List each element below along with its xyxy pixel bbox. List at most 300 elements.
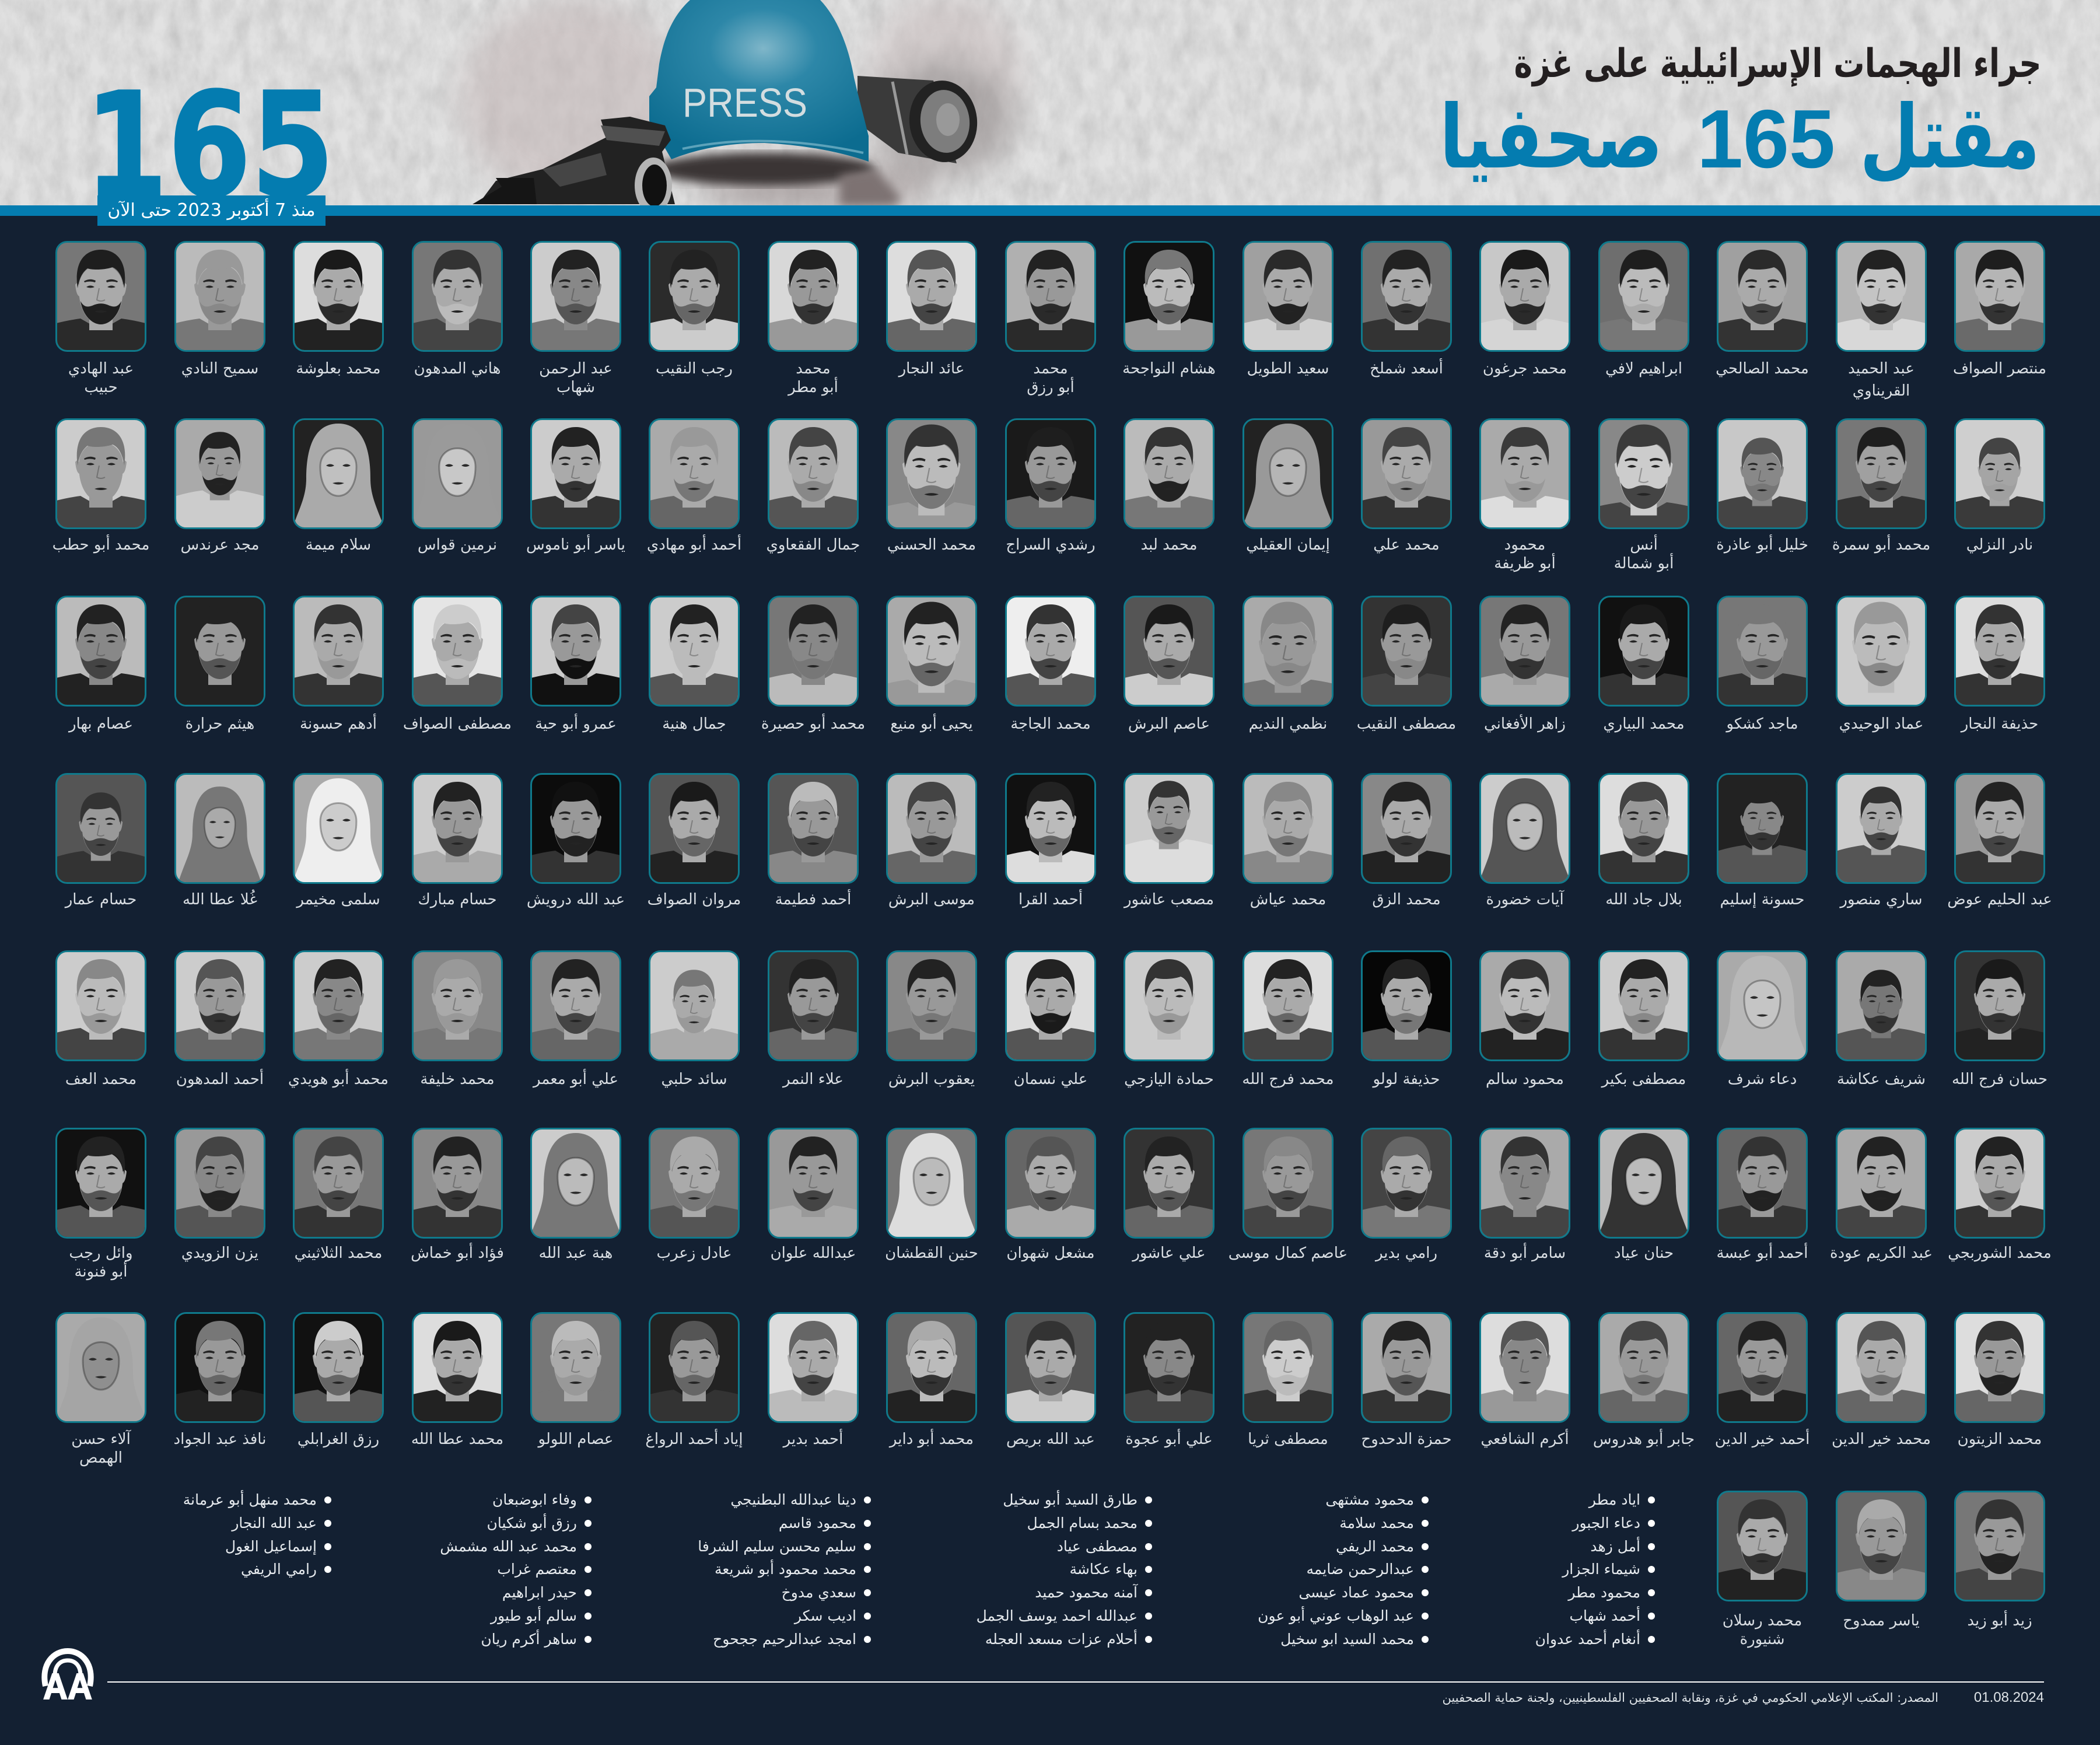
card: محمد العف bbox=[55, 950, 146, 1108]
card: يزن الزويدي bbox=[174, 1128, 265, 1285]
card: حسان فرج الله bbox=[1954, 950, 2045, 1108]
card: محمود أبو ظريفة bbox=[1479, 418, 1570, 576]
card: سائد حلبي bbox=[649, 950, 740, 1108]
card: محمد عياش: محمد عياش bbox=[1250, 891, 1326, 908]
name list column 3: طارق السيد أبو سخيل bbox=[1003, 1491, 1138, 1508]
card: أحمد فطيمة: أحمد فطيمة bbox=[775, 891, 851, 908]
card: إيمان العقيلي: إيمان العقيلي bbox=[1246, 536, 1330, 554]
card: حمادة اليازجي bbox=[1124, 950, 1214, 1108]
card: رجب النقيب bbox=[649, 241, 740, 398]
card: محمد الجاجة bbox=[1005, 596, 1096, 753]
card: فؤاد أبو خماش: فؤاد أبو خماش bbox=[411, 1244, 504, 1262]
portrait row 5 bbox=[0, 950, 2100, 1120]
card: عصام بهار: عصام بهار bbox=[69, 715, 133, 733]
card: محمد أبو رزق bbox=[1005, 241, 1096, 396]
card: ياسر ممدوح bbox=[1836, 1491, 1927, 1648]
card: عبد الله بريص: عبد الله بريص bbox=[1006, 1431, 1095, 1448]
card: محمد خير الدين bbox=[1836, 1312, 1927, 1470]
card: منتصر الصواف: منتصر الصواف bbox=[1953, 360, 2046, 377]
name list column 2: محمود مشتهى bbox=[1325, 1491, 1414, 1508]
name list column 3: آمنه محمود حميد bbox=[1035, 1584, 1138, 1601]
card: محمد الصالحي: محمد الصالحي bbox=[1716, 360, 1809, 377]
card: إيمان العقيلي bbox=[1242, 418, 1334, 576]
card: عماد الوحيدي bbox=[1836, 596, 1927, 753]
portrait row 7 bbox=[0, 1312, 2100, 1481]
card: أدهم حسونة: أدهم حسونة bbox=[300, 715, 377, 733]
card: محمد خليفة bbox=[412, 950, 503, 1108]
header banner with helmet illustration bbox=[0, 0, 2100, 205]
card: حنين القطشان: حنين القطشان bbox=[885, 1244, 978, 1262]
icon: AA logo bbox=[41, 1648, 94, 1701]
footer rule bbox=[107, 1681, 2044, 1683]
card: عبد الرحمن شهاب bbox=[530, 241, 621, 398]
card: محمد الحسني bbox=[886, 418, 977, 576]
card: ماجد كشكو: ماجد كشكو bbox=[1726, 715, 1798, 733]
card: محمد بعلوشة bbox=[293, 241, 384, 398]
main title: صحفيا bbox=[1440, 87, 1663, 188]
name list column 1: اياد مطر bbox=[1589, 1491, 1640, 1508]
card: بلال جاد الله bbox=[1598, 773, 1689, 931]
name list column 5: حيدر ابراهيم bbox=[502, 1584, 577, 1601]
card: هيثم حرارة: هيثم حرارة bbox=[186, 715, 254, 733]
card: ساري منصور bbox=[1836, 773, 1927, 931]
card: نرمين قواس: نرمين قواس bbox=[418, 536, 497, 554]
card: حسونة إسليم bbox=[1717, 773, 1808, 931]
card: مصطفى النقيب: مصطفى النقيب bbox=[1357, 715, 1456, 733]
icon: blue press helmet bbox=[649, 0, 869, 162]
card: علي أبو عجوة bbox=[1124, 1312, 1214, 1470]
card: هبة عبد الله bbox=[530, 1128, 621, 1285]
card: أسعد شملخ: أسعد شملخ bbox=[1370, 360, 1443, 377]
card: وائل رجب أبو فنونة bbox=[55, 1128, 146, 1285]
icon: camera lens bbox=[858, 76, 981, 166]
card: محمد أبو حصيرة: محمد أبو حصيرة bbox=[761, 715, 865, 733]
card: علي نسمان bbox=[1005, 950, 1096, 1108]
card: أحمد أبو عبسة bbox=[1717, 1128, 1808, 1285]
card: حسونة إسليم: حسونة إسليم bbox=[1720, 891, 1804, 908]
card: محمود سالم: محمود سالم bbox=[1486, 1071, 1564, 1088]
card: أكرم الشافعي: أكرم الشافعي bbox=[1480, 1431, 1569, 1448]
card: جابر أبو هدروس bbox=[1598, 1312, 1689, 1470]
card: حسام مبارك bbox=[412, 773, 503, 931]
card: سميح النادي: سميح النادي bbox=[181, 360, 258, 377]
card: أحمد خير الدين: أحمد خير الدين bbox=[1715, 1431, 1810, 1448]
card: دعاء شرف bbox=[1717, 950, 1808, 1108]
name list column 2 bbox=[1125, 1488, 1429, 1651]
card: عاصم كمال موسى: عاصم كمال موسى bbox=[1228, 1244, 1348, 1262]
card: سعيد الطويل bbox=[1242, 241, 1334, 377]
card: ياسر أبو ناموس: ياسر أبو ناموس bbox=[526, 536, 625, 554]
name list column 1: شيماء الجزار bbox=[1562, 1561, 1640, 1578]
card: يحيى أبو منيع: يحيى أبو منيع bbox=[890, 715, 973, 733]
card: جمال هنية: جمال هنية bbox=[662, 715, 726, 733]
card: آيات خضورة: آيات خضورة bbox=[1486, 891, 1564, 908]
card: يعقوب البرش: يعقوب البرش bbox=[888, 1071, 975, 1088]
card: عادل زعرب bbox=[649, 1128, 740, 1285]
name list column 4 bbox=[568, 1488, 871, 1651]
card: جمال الفقعاوي: جمال الفقعاوي bbox=[766, 536, 860, 554]
card: محمد لبد: محمد لبد bbox=[1140, 536, 1198, 554]
name list column 1: أمل زهد bbox=[1590, 1538, 1640, 1555]
name list column 1: أحمد شهاب bbox=[1569, 1607, 1640, 1624]
card: عماد الوحيدي: عماد الوحيدي bbox=[1839, 715, 1923, 733]
name list column 1: دعاء الجبور bbox=[1572, 1515, 1640, 1531]
card: أحمد أبو عبسة: أحمد أبو عبسة bbox=[1717, 1244, 1808, 1262]
name list column 4: سعدي مدوخ bbox=[782, 1584, 856, 1601]
card: عائد النجار bbox=[886, 241, 977, 398]
card: ابراهيم لافي: ابراهيم لافي bbox=[1605, 360, 1682, 377]
card: علي أبو معمر: علي أبو معمر bbox=[533, 1071, 618, 1088]
card: ماجد كشكو bbox=[1717, 596, 1808, 753]
card: يحيى أبو منيع bbox=[886, 596, 977, 753]
portrait row 8 bbox=[0, 1491, 2100, 1660]
icon: blue press helmet: PRESS bbox=[682, 80, 807, 125]
card: ياسر أبو ناموس bbox=[530, 418, 621, 576]
card: نافذ عبد الجواد bbox=[174, 1312, 265, 1470]
name list column 6: محمد منهل أبو عرمانة bbox=[183, 1491, 317, 1508]
card: عبدالله علوان: عبدالله علوان bbox=[771, 1244, 856, 1262]
card: محمد رسلان شنيورة: محمد رسلان bbox=[1723, 1612, 1802, 1629]
card: محمد الثلاثيني bbox=[293, 1128, 384, 1285]
card: موسى البرش: موسى البرش bbox=[888, 891, 975, 908]
card: رشدي السراج bbox=[1005, 418, 1096, 576]
card: هشام النواجحة bbox=[1122, 241, 1216, 377]
card: مجد عرندس bbox=[174, 418, 265, 576]
name list column 3: مصطفى عياد bbox=[1057, 1538, 1138, 1555]
card: محمد الزيتون: محمد الزيتون bbox=[1958, 1431, 2042, 1448]
card: محمد فرج الله bbox=[1242, 950, 1334, 1108]
card: مصطفى ثريا: مصطفى ثريا bbox=[1248, 1431, 1328, 1448]
card: علاء النمر bbox=[768, 950, 859, 1108]
card: محمد عياش bbox=[1242, 773, 1334, 931]
card: شريف عكاشة: شريف عكاشة bbox=[1837, 1071, 1926, 1088]
card: حنين القطشان bbox=[886, 1128, 977, 1285]
date badge bbox=[97, 195, 326, 226]
portrait row 6 bbox=[0, 1128, 2100, 1297]
card: أحمد خير الدين bbox=[1717, 1312, 1808, 1470]
card: حسام عمار bbox=[55, 773, 146, 931]
card: محمد أبو رزق: محمد bbox=[1033, 360, 1068, 377]
card: محمد عطا الله bbox=[412, 1312, 503, 1470]
name list column 6: رامي الريفي bbox=[241, 1561, 317, 1578]
card: محمد رسلان شنيورة bbox=[1717, 1491, 1808, 1648]
card: سلمى مخيمر: سلمى مخيمر bbox=[296, 891, 380, 908]
card: سلام ميمة bbox=[293, 418, 384, 576]
card: زيد أبو زيد bbox=[1954, 1491, 2045, 1648]
card: نظمي النديم: نظمي النديم bbox=[1249, 715, 1327, 733]
card: عبد الكريم عودة bbox=[1836, 1128, 1927, 1285]
card: رامي بدير: رامي بدير bbox=[1376, 1244, 1437, 1262]
blue band bbox=[0, 205, 2100, 216]
card: خليل أبو عاذرة bbox=[1717, 418, 1808, 576]
card: عادل زعرب: عادل زعرب bbox=[656, 1244, 732, 1262]
name list column 4: دينا عبدالله البطنيجي bbox=[730, 1491, 856, 1508]
card: نظمي النديم bbox=[1242, 596, 1334, 753]
card: عبد الهادي حبيب: عبد الهادي bbox=[68, 360, 134, 377]
card: ابراهيم لافي bbox=[1598, 241, 1689, 377]
card: محمد أبو سمرة: محمد أبو سمرة bbox=[1832, 536, 1930, 554]
card: مروان الصواف bbox=[649, 773, 740, 931]
card: بلال جاد الله: بلال جاد الله bbox=[1605, 891, 1682, 908]
name list column 5 bbox=[288, 1488, 592, 1651]
card: نادر النزلي: نادر النزلي bbox=[1966, 536, 2033, 554]
card: عبد الهادي حبيب: حبيب bbox=[84, 379, 118, 396]
card: عبد الرحمن شهاب: عبد الرحمن bbox=[539, 360, 612, 377]
card: هبة عبد الله: هبة عبد الله bbox=[539, 1244, 612, 1262]
card: آلاء حسن الهمص: آلاء حسن bbox=[71, 1431, 131, 1448]
card: محمد أبو داير bbox=[886, 1312, 977, 1470]
name list column 3 bbox=[849, 1488, 1152, 1651]
card: محمود أبو ظريفة: أبو ظريفة bbox=[1494, 555, 1556, 572]
card: عبد الحليم عوض: عبد الحليم عوض bbox=[1947, 891, 2052, 908]
card: محمود سالم bbox=[1479, 950, 1570, 1108]
card: علي نسمان: علي نسمان bbox=[1014, 1071, 1087, 1088]
card: حمادة اليازجي: حمادة اليازجي bbox=[1124, 1071, 1214, 1088]
card: نافذ عبد الجواد: نافذ عبد الجواد bbox=[174, 1431, 266, 1448]
source note: المصدر: المكتب الإعلامي الحكومي في غزة، ونقابة الصحفيين الفلسطينيين، ولجنة حماية الصحفيين bbox=[1442, 1691, 1938, 1705]
card: سلام ميمة: سلام ميمة bbox=[306, 536, 371, 554]
card: هاني المدهون bbox=[412, 241, 503, 398]
card: محمد الزق: محمد الزق bbox=[1372, 891, 1441, 908]
name list column 6 bbox=[28, 1488, 331, 1581]
card: سامر أبو دقة: سامر أبو دقة bbox=[1484, 1244, 1566, 1262]
card: علاء النمر: علاء النمر bbox=[783, 1071, 844, 1088]
card: محمد البياري bbox=[1598, 596, 1689, 753]
card: حمزة الدحدوح bbox=[1361, 1312, 1452, 1470]
card: علي عاشور: علي عاشور bbox=[1132, 1244, 1206, 1262]
card: مصطفى بكير bbox=[1598, 950, 1689, 1108]
card: أحمد المدهون: أحمد المدهون bbox=[176, 1071, 264, 1088]
card: علي عاشور bbox=[1124, 1128, 1214, 1285]
card: محمد أبو حطب: محمد أبو حطب bbox=[52, 536, 149, 554]
card: عمرو أبو حية bbox=[530, 596, 621, 753]
card: أنس أبو شمالة: أنس bbox=[1630, 536, 1658, 554]
big number 165: 165 bbox=[85, 62, 334, 230]
card: سامر أبو دقة bbox=[1479, 1128, 1570, 1285]
card: خليل أبو عاذرة: خليل أبو عاذرة bbox=[1716, 536, 1808, 554]
card: مصعب عاشور: مصعب عاشور bbox=[1124, 891, 1214, 908]
card: محمد جرغون bbox=[1479, 241, 1570, 377]
name list column 5: سالم أبو طيور bbox=[491, 1607, 577, 1624]
card: حذيفة لولو: حذيفة لولو bbox=[1373, 1071, 1440, 1088]
card: مصطفى الصواف bbox=[412, 596, 503, 753]
card: فؤاد أبو خماش bbox=[412, 1128, 503, 1285]
card: حنان عياد: حنان عياد bbox=[1614, 1244, 1674, 1262]
card: حمزة الدحدوح: حمزة الدحدوح bbox=[1361, 1431, 1452, 1448]
card: محمد علي: محمد علي bbox=[1373, 536, 1440, 554]
card: مشعل شهوان: مشعل شهوان bbox=[1006, 1244, 1095, 1262]
card: عاصم البرش: عاصم البرش bbox=[1128, 715, 1210, 733]
card: عبد الرحمن شهاب: شهاب bbox=[556, 379, 595, 396]
name list column 5: رزق أبو شكيان bbox=[487, 1515, 577, 1531]
portrait row 2 bbox=[0, 418, 2100, 588]
card: يزن الزويدي: يزن الزويدي bbox=[181, 1244, 258, 1262]
date: 01.08.2024 bbox=[1974, 1690, 2044, 1705]
card: جمال الفقعاوي bbox=[768, 418, 859, 576]
name list column 3: أحلام عزات مسعد العجله bbox=[985, 1631, 1138, 1648]
subtitle: جراء الهجمات الإسرائيلية على غزة bbox=[1514, 41, 2042, 87]
card: أحمد المدهون bbox=[174, 950, 265, 1108]
name list column 4: اديب سكر bbox=[794, 1607, 856, 1624]
card: ياسر ممدوح: ياسر ممدوح bbox=[1843, 1612, 1920, 1629]
card: محمود أبو ظريفة: محمود bbox=[1504, 536, 1545, 554]
name list column 2: محمد الريفي bbox=[1336, 1538, 1414, 1555]
card: محمد الشوربجي bbox=[1954, 1128, 2045, 1285]
name list column 1: محمود مطر bbox=[1568, 1584, 1640, 1601]
card: محمد رسلان شنيورة: شنيورة bbox=[1740, 1631, 1785, 1648]
card: محمد الصالحي bbox=[1716, 241, 1809, 377]
card: محمد أبو مطر: أبو مطر bbox=[788, 379, 838, 396]
main title: مقتل bbox=[1860, 87, 2040, 188]
name list column 6: عبد الله النجار bbox=[232, 1515, 317, 1531]
card: محمد جرغون: محمد جرغون bbox=[1483, 360, 1567, 377]
card: محمد أبو داير: محمد أبو داير bbox=[890, 1431, 974, 1448]
main title: 165 bbox=[1697, 93, 1835, 186]
card: أحمد أبو مهادي bbox=[649, 418, 740, 576]
card: رزق الغرابلي: رزق الغرابلي bbox=[298, 1431, 379, 1448]
card: ساري منصور: ساري منصور bbox=[1840, 891, 1923, 908]
card: محمد عطا الله: محمد عطا الله bbox=[411, 1431, 503, 1448]
card: عبد الهادي حبيب bbox=[55, 241, 146, 398]
card: محمد الثلاثيني: محمد الثلاثيني bbox=[295, 1244, 382, 1262]
card: غُلا عطا الله bbox=[174, 773, 265, 931]
card: محمد البياري: محمد البياري bbox=[1603, 715, 1685, 733]
card: محمد الزيتون bbox=[1954, 1312, 2045, 1470]
card: وائل رجب أبو فنونة: أبو فنونة bbox=[74, 1263, 128, 1281]
card: مروان الصواف: مروان الصواف bbox=[648, 891, 741, 908]
card: يعقوب البرش bbox=[886, 950, 977, 1108]
card: محمد أبو حصيرة bbox=[768, 596, 859, 753]
card: محمد العف: محمد العف bbox=[65, 1071, 136, 1088]
portrait row 3 bbox=[0, 596, 2100, 765]
card: أحمد القرا: أحمد القرا bbox=[1019, 891, 1083, 908]
name list column 2: محمد السيد ابو سخيل bbox=[1280, 1631, 1414, 1648]
card: أسعد شملخ bbox=[1361, 241, 1452, 377]
card: عبد الحليم عوض bbox=[1954, 773, 2045, 931]
card: أدهم حسونة bbox=[293, 596, 384, 753]
card: جابر أبو هدروس: جابر أبو هدروس bbox=[1593, 1431, 1695, 1448]
card: محمد الشوربجي: محمد الشوربجي bbox=[1948, 1244, 2052, 1262]
card: سعيد الطويل: سعيد الطويل bbox=[1247, 360, 1329, 377]
name list column 3: عبدالله احمد يوسف الجمل bbox=[977, 1607, 1138, 1624]
card: مصطفى النقيب bbox=[1361, 596, 1452, 753]
card: وائل رجب أبو فنونة: وائل رجب bbox=[69, 1244, 133, 1262]
card: دعاء شرف: دعاء شرف bbox=[1728, 1071, 1797, 1088]
card: عاصم البرش bbox=[1124, 596, 1214, 753]
card: زاهر الأفغاني bbox=[1479, 596, 1570, 753]
card: عبد الله درويش: عبد الله درويش bbox=[527, 891, 625, 908]
card: حذيفة النجار bbox=[1954, 596, 2045, 753]
card: محمد أبو هويدي bbox=[293, 950, 384, 1108]
card: حسام عمار: حسام عمار bbox=[65, 891, 136, 908]
card: محمد أبو حطب bbox=[55, 418, 146, 576]
card: أحمد بدير bbox=[768, 1312, 859, 1470]
card: أحمد القرا bbox=[1005, 773, 1096, 931]
name list column 2: محمد سلامة bbox=[1339, 1515, 1414, 1531]
card: مصطفى بكير: مصطفى بكير bbox=[1602, 1071, 1686, 1088]
card: رجب النقيب: رجب النقيب bbox=[656, 360, 733, 377]
card: إياد أحمد الرواغ bbox=[649, 1312, 740, 1470]
card: عبد الله بريص bbox=[1005, 1312, 1096, 1470]
card: محمد فرج الله: محمد فرج الله bbox=[1242, 1071, 1334, 1088]
card: رامي بدير bbox=[1361, 1128, 1452, 1285]
portrait row 1 bbox=[55, 241, 2046, 400]
name list column 1: أنغام أحمد عدوان bbox=[1535, 1631, 1640, 1648]
card: زاهر الأفغاني: زاهر الأفغاني bbox=[1484, 715, 1566, 733]
card: عاصم كمال موسى bbox=[1242, 1128, 1334, 1285]
name list column 2: محمود عماد عيسى bbox=[1298, 1584, 1414, 1601]
card: مجد عرندس: مجد عرندس bbox=[180, 536, 260, 554]
card: محمد الحسني: محمد الحسني bbox=[887, 536, 976, 554]
card: جمال هنية bbox=[649, 596, 740, 753]
card: سلمى مخيمر bbox=[293, 773, 384, 931]
card: مصطفى الصواف: مصطفى الصواف bbox=[403, 715, 512, 733]
card: عمرو أبو حية: عمرو أبو حية bbox=[535, 715, 617, 733]
card: عبدالله علوان bbox=[768, 1128, 859, 1285]
card: حذيفة لولو bbox=[1361, 950, 1452, 1108]
name list column 4: محمد محمود أبو شريعة bbox=[715, 1561, 856, 1578]
name list column 2: عبدالرحمن ضايمه bbox=[1307, 1561, 1414, 1578]
portrait row 4 bbox=[0, 773, 2100, 942]
main title bbox=[1440, 87, 2040, 188]
card: عبد الحميد القريناوي bbox=[1836, 241, 1927, 400]
card: عبد الحميد القريناوي: القريناوي bbox=[1853, 382, 1910, 400]
card: عصام اللولو bbox=[530, 1312, 621, 1470]
card: سميح النادي bbox=[174, 241, 265, 398]
card: آلاء حسن الهمص bbox=[55, 1312, 146, 1470]
card: أحمد بدير: أحمد بدير bbox=[783, 1431, 843, 1448]
card: هشام النواجحة: هشام النواجحة bbox=[1122, 360, 1216, 377]
card: مصعب عاشور bbox=[1124, 773, 1214, 931]
card: أنس أبو شمالة: أبو شمالة bbox=[1614, 555, 1674, 572]
name list column 1 bbox=[1352, 1488, 1655, 1651]
card: عبد الحميد القريناوي: عبد الحميد bbox=[1848, 360, 1915, 377]
card: إياد أحمد الرواغ: إياد أحمد الرواغ bbox=[645, 1431, 743, 1448]
card: محمد الزق bbox=[1361, 773, 1452, 931]
name list column 5: ساهر أكرم ريان bbox=[481, 1631, 577, 1648]
card: عبد الله درويش bbox=[530, 773, 621, 931]
card: محمد بعلوشة: محمد بعلوشة bbox=[296, 360, 381, 377]
card: حنان عياد bbox=[1598, 1128, 1689, 1285]
card: عائد النجار: عائد النجار bbox=[899, 360, 964, 377]
card: حذيفة النجار: حذيفة النجار bbox=[1961, 715, 2038, 733]
card: أكرم الشافعي bbox=[1479, 1312, 1570, 1470]
name list column 5: وفاء ابوضبعان bbox=[492, 1491, 577, 1508]
name list column 3: بهاء عكاشة bbox=[1070, 1561, 1138, 1578]
card: محمد أبو رزق: أبو رزق bbox=[1027, 379, 1074, 396]
card: حسان فرج الله: حسان فرج الله bbox=[1952, 1071, 2048, 1088]
name list column 4: سليم محسن سليم الشرفا bbox=[698, 1538, 856, 1555]
card: محمد أبو مطر bbox=[768, 241, 859, 398]
card: محمد علي bbox=[1361, 418, 1452, 576]
card: علي أبو عجوة: علي أبو عجوة bbox=[1125, 1431, 1213, 1448]
name list column 2: عبد الوهاب عوني أبو عون bbox=[1258, 1607, 1414, 1624]
date badge: منذ 7 أكتوبر 2023 حتى الآن bbox=[107, 200, 316, 221]
card: نرمين قواس bbox=[412, 418, 503, 576]
card: علي أبو معمر bbox=[530, 950, 621, 1108]
card: محمد أبو سمرة bbox=[1836, 418, 1927, 576]
card: عصام بهار bbox=[55, 596, 146, 753]
card: أحمد فطيمة bbox=[768, 773, 859, 931]
card: موسى البرش bbox=[886, 773, 977, 931]
card: محمد الجاجة: محمد الجاجة bbox=[1010, 715, 1091, 733]
name list column 5: محمد عبد الله مشمش bbox=[440, 1538, 577, 1555]
card: هاني المدهون: هاني المدهون bbox=[414, 360, 501, 377]
card: زيد أبو زيد: زيد أبو زيد bbox=[1967, 1612, 2032, 1629]
name list column 6: إسماعيل الغول bbox=[225, 1538, 317, 1555]
card: شريف عكاشة bbox=[1836, 950, 1927, 1108]
icon: broken camera bbox=[473, 117, 675, 214]
